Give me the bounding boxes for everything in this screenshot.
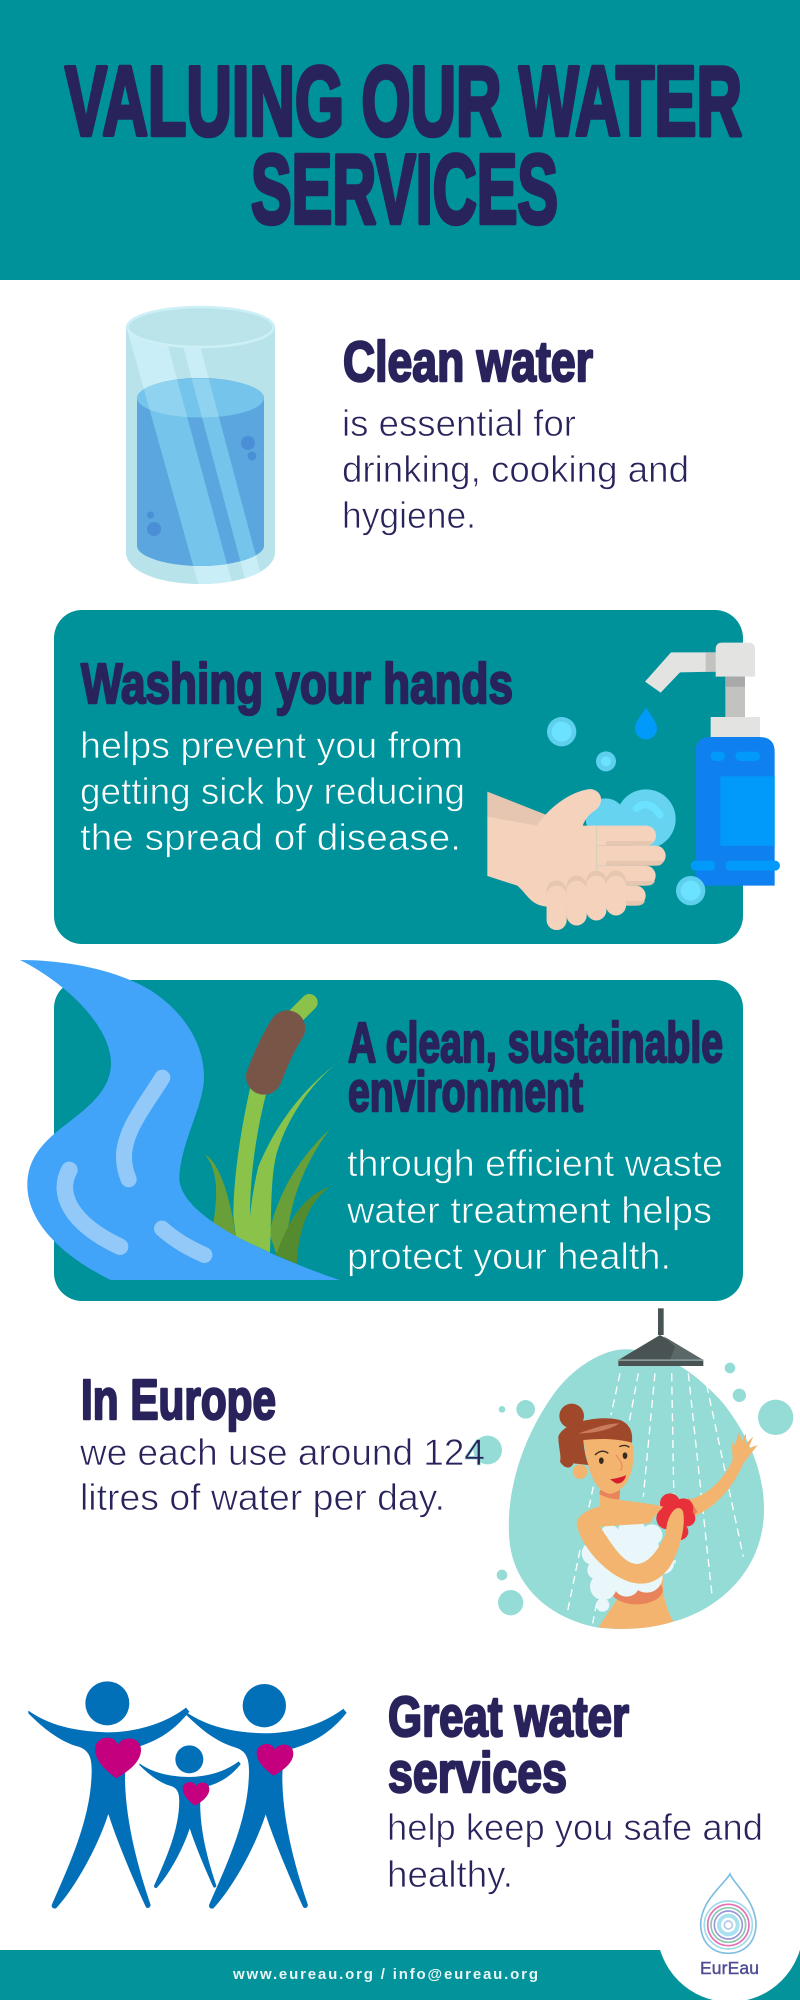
text block: great water services: Great water — [388, 1685, 629, 1749]
title — [65, 46, 742, 244]
icon: soap dispenser and hand — [487, 643, 780, 930]
adult left — [28, 1681, 189, 1909]
header band — [0, 0, 800, 280]
text block: clean water: hygiene. — [342, 495, 476, 536]
text block: washing your hands: getting sick by reducing — [80, 771, 465, 812]
icon: family with hearts — [28, 1681, 347, 1909]
text block: great water services — [387, 1685, 763, 1895]
reeds — [205, 1002, 339, 1264]
hearts — [95, 1738, 293, 1806]
footer contact text: www.eureau.org / info@eureau.org — [232, 1966, 538, 1983]
backdrop blob and bubbles — [473, 1349, 793, 1629]
text block: great water services: help keep you safe and — [387, 1807, 763, 1848]
text block: washing your hands — [80, 652, 513, 858]
text block: sustainable environment — [346, 1011, 723, 1277]
logo: EurEau drop — [701, 1874, 756, 1953]
icon: glass of water — [126, 307, 275, 590]
text block: great water services: services — [388, 1741, 567, 1805]
water streams — [567, 1373, 743, 1623]
text block: clean water: Clean water — [343, 330, 593, 394]
icon: woman in shower — [473, 1308, 793, 1629]
text block: clean water: is essential for — [342, 403, 576, 444]
woman — [558, 1404, 758, 1629]
shower head — [618, 1308, 703, 1366]
panel: washing hands — [54, 610, 743, 944]
river — [20, 960, 339, 1280]
text block: washing your hands: Washing your hands — [81, 652, 513, 716]
text block: in Europe: litres of water per day. — [80, 1477, 445, 1518]
soap dispenser — [645, 643, 780, 886]
bubbles — [547, 717, 705, 905]
soap drop — [635, 707, 657, 739]
text block: clean water — [342, 330, 689, 536]
text block: clean water: drinking, cooking and — [342, 449, 689, 490]
text block: in Europe: In Europe — [81, 1368, 276, 1432]
text block: sustainable environment: water treatment helps — [346, 1190, 712, 1231]
hand — [487, 789, 666, 930]
text block: washing your hands: the spread of disease. — [80, 817, 461, 858]
text block: sustainable environment: environment — [348, 1060, 583, 1124]
footer band — [0, 1950, 800, 2000]
text block: sustainable environment: through efficient waste — [347, 1143, 723, 1184]
text block: in Europe — [79, 1368, 485, 1518]
adult right — [186, 1684, 347, 1909]
text block: in Europe: we each use around 124 — [79, 1432, 485, 1473]
text block: washing your hands: helps prevent you from — [80, 725, 463, 766]
logo wordmark: EurEau — [700, 1958, 759, 1978]
panel: sustainable environment — [54, 980, 743, 1301]
child — [139, 1745, 241, 1888]
logo badge — [657, 1856, 800, 2000]
text block: sustainable environment: protect your health. — [347, 1236, 671, 1277]
text block: great water services: healthy. — [387, 1854, 513, 1895]
icon: river and reeds — [20, 960, 339, 1280]
title: SERVICES — [251, 134, 558, 244]
